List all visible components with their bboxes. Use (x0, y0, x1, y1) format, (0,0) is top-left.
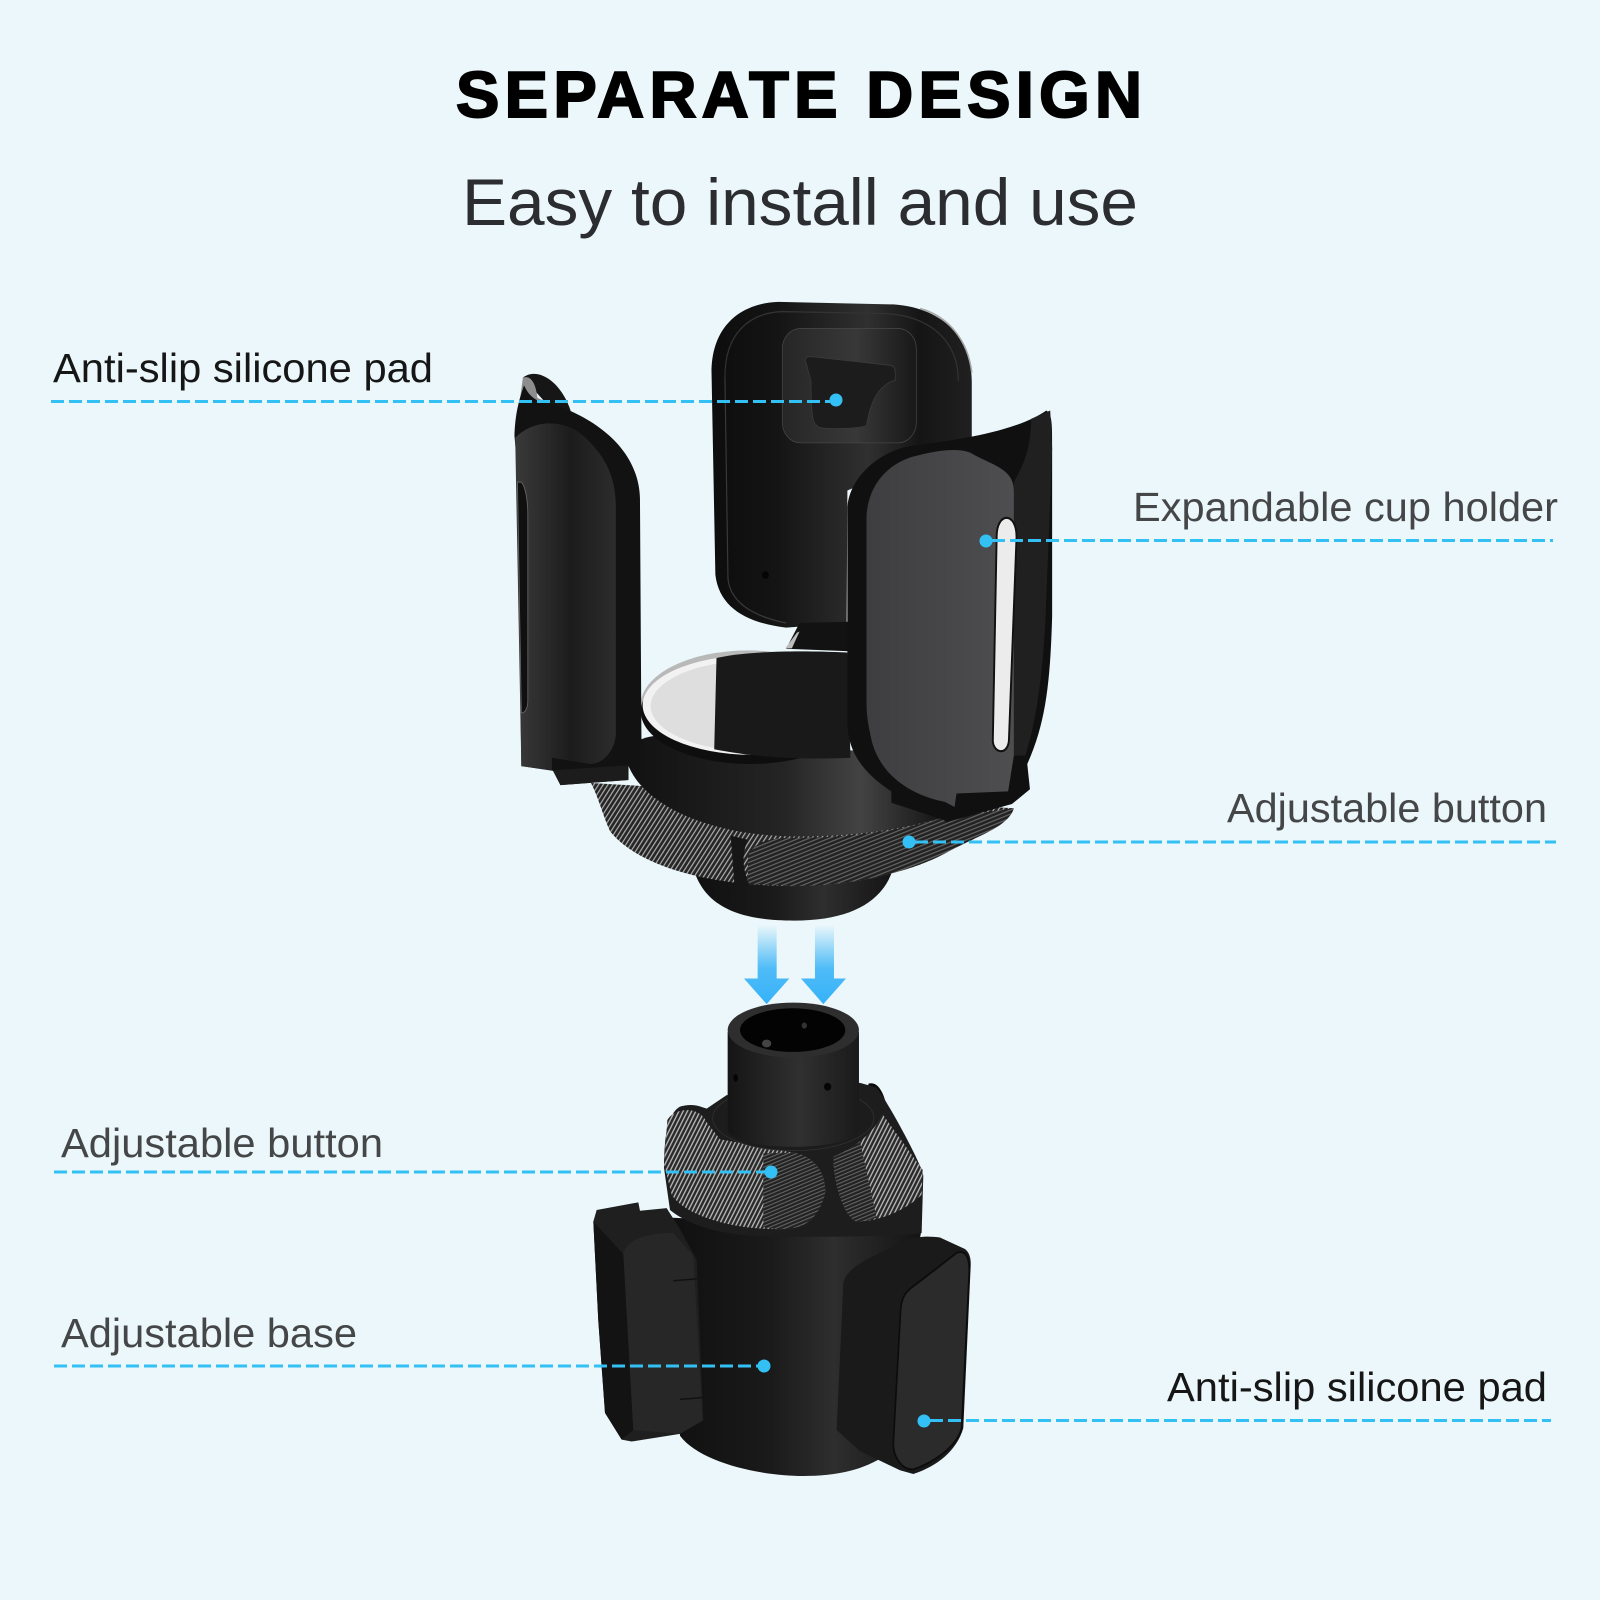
callout: adjustable button right: Adjustable button (1227, 785, 1547, 831)
main cylinder (670, 1218, 922, 1476)
callout: adjustable button left: Adjustable button (61, 1120, 383, 1166)
subtitle: Easy to install and use (462, 165, 1138, 239)
collar (713, 1086, 874, 1151)
left gripping pad (593, 1202, 703, 1442)
upper part: expandable cup holder (514, 302, 1052, 921)
back plate with pad (712, 302, 972, 628)
bottom cup (692, 865, 894, 921)
connector stem (786, 622, 849, 651)
knurled adjustment ring (591, 783, 1014, 886)
callout: anti-slip silicone pad top: Anti-slip silicone pad (53, 345, 433, 391)
callout: adjustable button right (902, 785, 1556, 848)
callout: adjustable button left (54, 1120, 778, 1178)
right wing (847, 410, 1052, 822)
callout: expandable cup holder: Expandable cup holder (1133, 484, 1558, 530)
center tube (728, 1003, 859, 1147)
base disc (641, 650, 861, 764)
knurled patch left (664, 1110, 825, 1229)
callout: anti-slip silicone pad top (51, 345, 842, 406)
callout: adjustable base (54, 1310, 770, 1372)
dark collar ring (625, 735, 939, 836)
anti-slip pad square (782, 328, 916, 443)
arrow 2 (801, 925, 846, 1004)
callout: adjustable base: Adjustable base (61, 1310, 357, 1356)
arrow 1 (744, 925, 789, 1004)
reflected back plate in disc (714, 651, 850, 758)
knurled patch right (834, 1114, 923, 1221)
title: SEPARATE DESIGN (456, 58, 1142, 131)
adjustable knob (664, 1083, 923, 1237)
callout: anti-slip silicone pad bottom (918, 1364, 1551, 1428)
lower part: adjustable base (593, 1003, 971, 1476)
assembly arrows (744, 925, 846, 1004)
white slot (993, 518, 1017, 751)
callout: anti-slip silicone pad bottom: Anti-slip silicone pad (1167, 1364, 1547, 1410)
hook (805, 357, 895, 429)
callout: expandable cup holder (980, 484, 1558, 548)
left wing (514, 374, 641, 785)
right gripping pad (837, 1237, 971, 1474)
